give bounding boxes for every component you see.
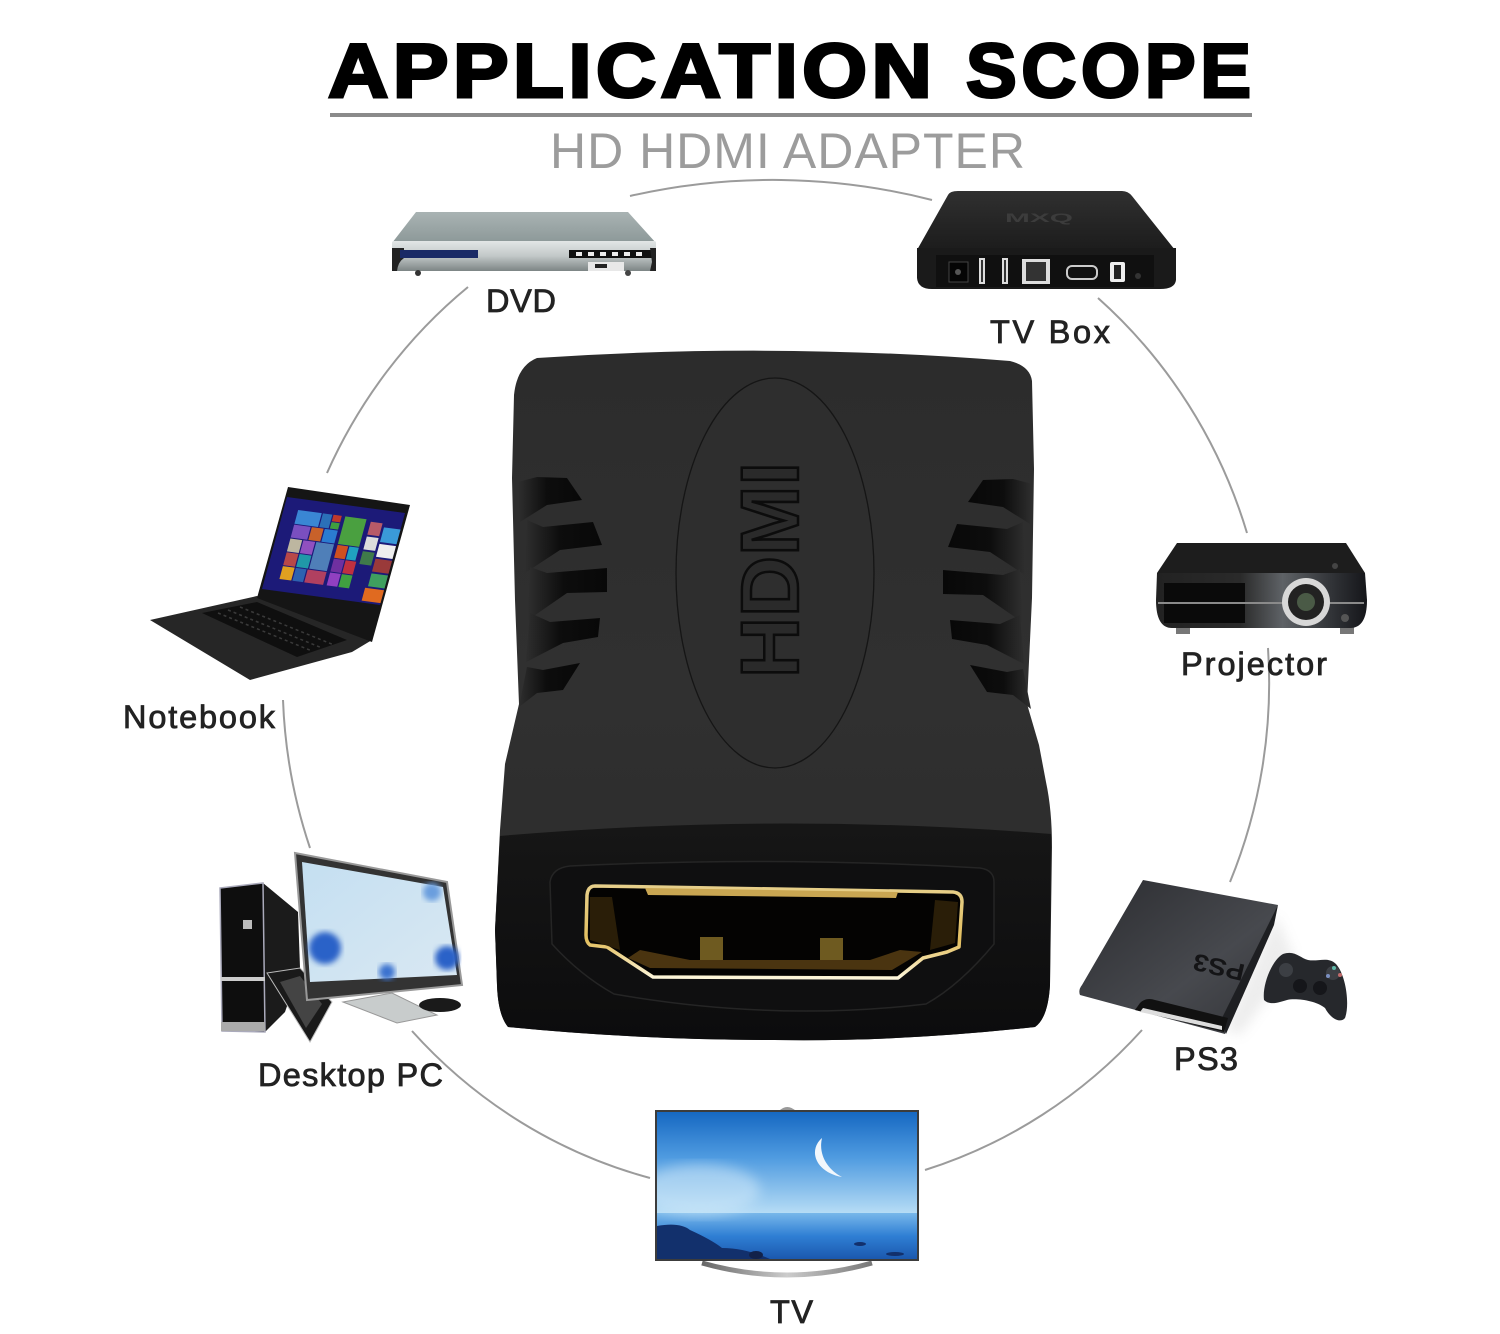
icon: notebook (150, 487, 410, 680)
left grip ribs (518, 477, 607, 707)
infographic canvas (125, 42, 1367, 1324)
subtitle: HD HDMI ADAPTER (550, 123, 1025, 179)
icon: TV box (917, 191, 1176, 289)
icon: TV (640, 1107, 919, 1275)
oval logo recess (676, 378, 874, 768)
title underline (330, 113, 1252, 117)
label: Desktop PC: Desktop PC (258, 1057, 443, 1093)
label: Projector: Projector (1181, 646, 1327, 682)
port (586, 886, 962, 978)
icon: PS3 console and controller: PS3 (1191, 947, 1247, 985)
recess outline (550, 861, 994, 1011)
icon: PS3 console and controller (1079, 880, 1347, 1035)
icon: desktop PC (220, 853, 462, 1042)
label: Notebook: Notebook (123, 699, 276, 735)
label: PS3: PS3 (1174, 1041, 1238, 1077)
label: TV Box: TV Box (990, 314, 1110, 350)
icon: TV box: MXQ (1005, 211, 1073, 225)
title: APPLICATION (328, 29, 932, 113)
front face (495, 823, 1051, 1040)
HDMI adapter (495, 351, 1052, 1040)
icon: DVD player (392, 212, 656, 276)
label: TV: TV (770, 1294, 813, 1330)
title (328, 29, 1251, 114)
right grip ribs (943, 479, 1032, 709)
connecting ring arcs (283, 180, 1269, 1178)
label: DVD: DVD (486, 283, 556, 319)
adapter body (495, 351, 1052, 1040)
HDMI logo: HDMI (725, 462, 816, 678)
icon: projector (1156, 543, 1367, 634)
title: SCOPE (966, 29, 1251, 114)
